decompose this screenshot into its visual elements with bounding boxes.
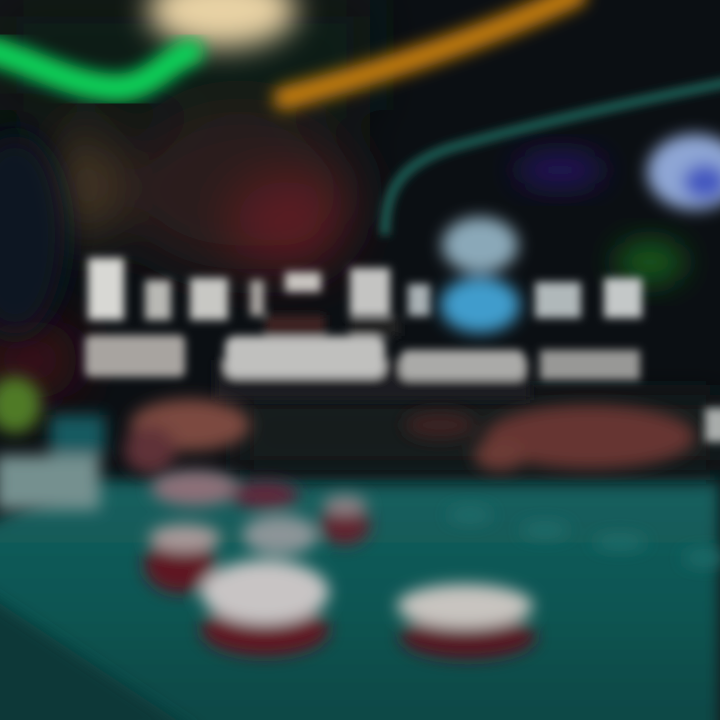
right chip <box>400 615 536 659</box>
card stack at left <box>0 415 105 510</box>
dark table rail <box>240 395 720 470</box>
blue figure <box>440 217 520 333</box>
front chip <box>201 604 329 656</box>
orange neon band <box>285 0 575 98</box>
right hand <box>404 405 695 471</box>
left hand <box>124 399 250 474</box>
table edge shadow <box>0 590 200 720</box>
headline block <box>85 258 642 400</box>
monitor outline <box>385 82 720 235</box>
middle chips <box>144 537 216 593</box>
dark figure at left <box>0 135 65 335</box>
back chips <box>151 470 239 506</box>
green ball <box>0 377 41 433</box>
chips cluster <box>144 470 536 659</box>
white cuff <box>705 408 720 442</box>
monitor purple glow <box>515 152 605 188</box>
green neon band <box>0 50 190 88</box>
background: dim room <box>0 0 370 400</box>
ceiling light <box>147 0 297 48</box>
green monitor glow <box>615 240 685 284</box>
faint table markings <box>448 508 720 565</box>
monitor blue badge <box>647 134 720 210</box>
table surface <box>0 480 720 720</box>
